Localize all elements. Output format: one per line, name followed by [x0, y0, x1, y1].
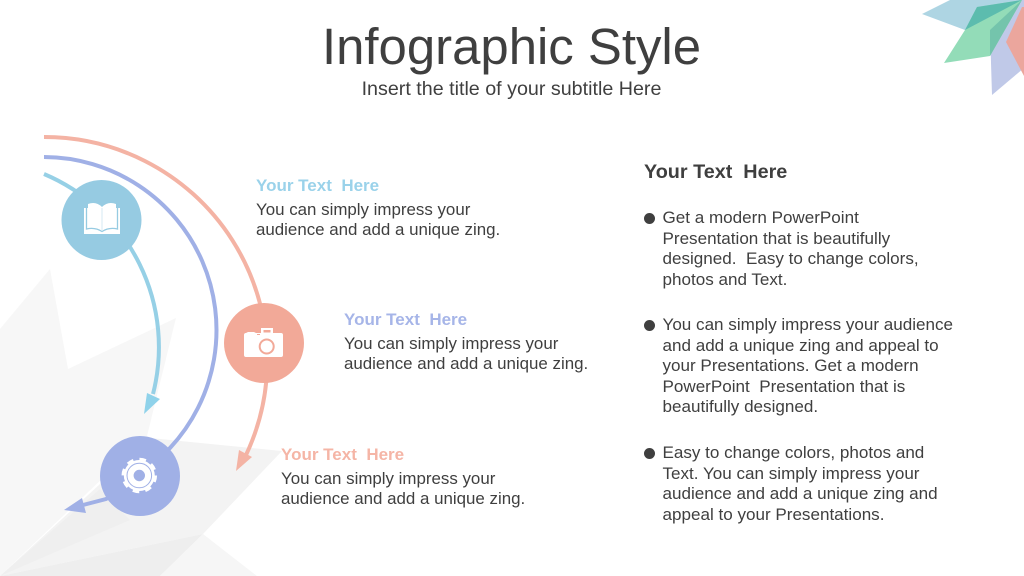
- background polygons: [0, 269, 282, 576]
- bullet 1: Presentation that is beautifully: [662, 228, 890, 248]
- arc: orange arrow: [44, 137, 267, 471]
- text block 2: Your Text Here: [344, 310, 467, 329]
- text block 3: You can simply impress your: [281, 469, 495, 488]
- icon circle: book: [62, 180, 142, 260]
- subtitle: Insert the title of your subtitle Here: [362, 78, 661, 100]
- corner polygons: [922, 0, 1024, 95]
- bullet 2: You can simply impress your audience: [662, 315, 953, 334]
- text block 2: audience and add a unique zing.: [344, 354, 588, 373]
- text block 3: Your Text Here: [281, 445, 404, 464]
- icon circle: gear: [100, 436, 180, 516]
- arc: purple arrow: [44, 157, 216, 513]
- text block 3: audience and add a unique zing.: [281, 489, 525, 508]
- text block 1: audience and add a unique zing.: [256, 220, 500, 239]
- bullet 3: Text. You can simply impress your: [662, 464, 920, 482]
- title: Infographic Style: [322, 18, 701, 75]
- icon circle: camera: [224, 303, 304, 383]
- text block 1: You can simply impress your: [256, 200, 470, 219]
- bullet 2: [644, 315, 953, 416]
- bullet 2: and add a unique zing and appeal to: [662, 336, 939, 354]
- text block 2: You can simply impress your: [344, 334, 558, 353]
- bullet 2: PowerPoint Presentation that is: [662, 376, 905, 396]
- bullet 1: Get a modern PowerPoint: [662, 208, 859, 227]
- text block 1: [256, 176, 500, 239]
- bullet 2: beautifully designed.: [662, 397, 818, 416]
- bullet 1: photos and Text.: [662, 270, 787, 288]
- text block 2: [344, 310, 588, 373]
- bullet 3: appeal to your Presentations.: [662, 504, 884, 524]
- arc: blue arrow: [44, 174, 160, 414]
- bullet 3: audience and add a unique zing and: [662, 484, 938, 503]
- bullet 3: [644, 443, 938, 524]
- bullet 1: [644, 208, 919, 288]
- text block 1: Your Text Here: [256, 176, 379, 195]
- text block 3: [281, 445, 525, 508]
- bullet 2: your Presentations. Get a modern: [662, 356, 919, 375]
- bullet 1: designed. Easy to change colors,: [662, 249, 919, 268]
- right heading: Your Text Here: [644, 161, 787, 183]
- bullet 3: Easy to change colors, photos and: [662, 443, 924, 462]
- right panel: [644, 161, 953, 524]
